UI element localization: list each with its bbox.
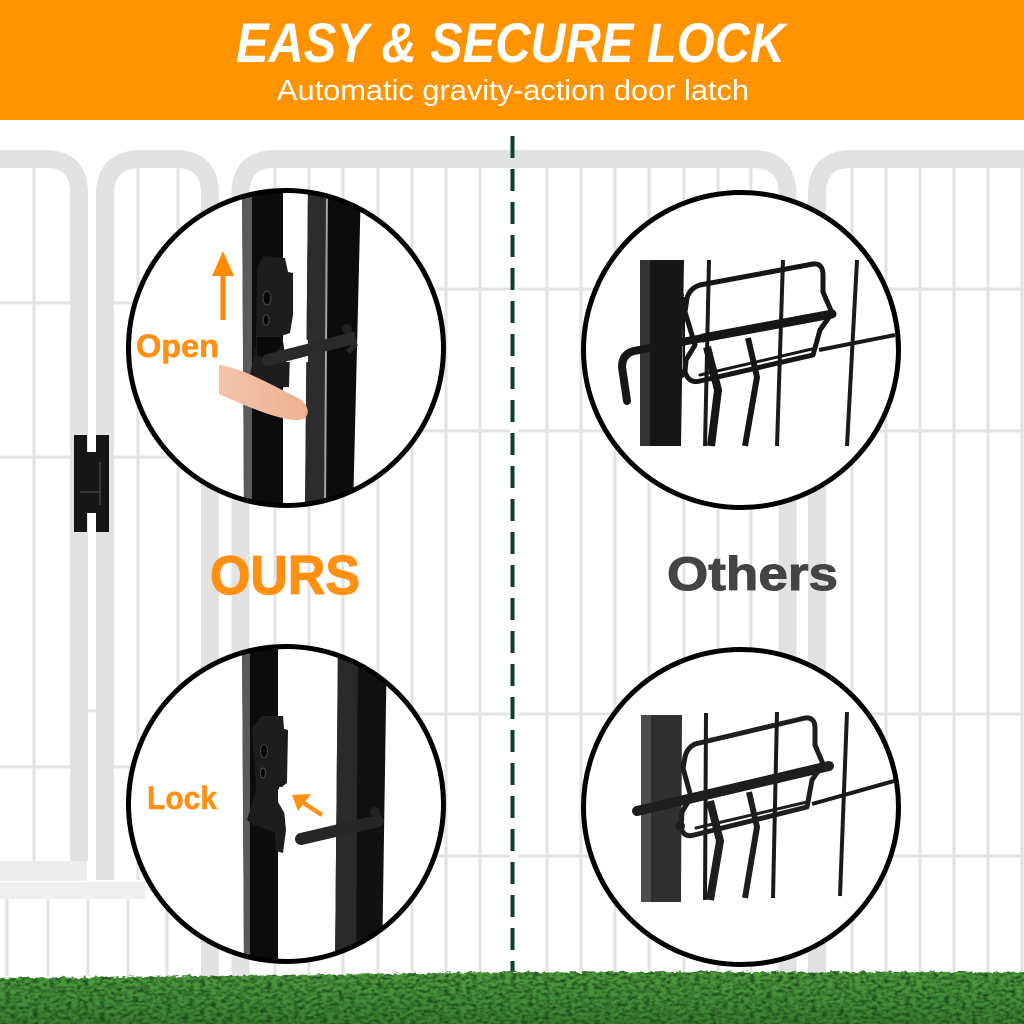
latch <box>247 716 380 853</box>
label: open: Open <box>136 328 219 364</box>
background fence <box>0 159 1024 976</box>
icon: lock arrow <box>292 794 322 815</box>
subtitle: Automatic gravity-action door latch <box>277 75 749 107</box>
panel: ours open circle <box>128 185 444 510</box>
icon: up arrow <box>212 251 234 320</box>
icon: finger <box>219 365 308 420</box>
circle outline <box>584 650 898 964</box>
grass strip <box>0 972 1024 1024</box>
label: lock: Lock <box>147 780 217 816</box>
latch wire frame <box>637 718 829 900</box>
title: EASY & SECURE LOCK <box>236 11 788 74</box>
hinge bracket <box>74 435 109 532</box>
panel: ours lock circle <box>128 640 444 965</box>
circle outline <box>128 190 444 506</box>
latch <box>250 256 355 388</box>
panel: others lock circle <box>584 650 898 964</box>
header banner <box>0 0 1024 120</box>
panel: others open circle <box>584 192 898 508</box>
heading: others: Others <box>667 547 838 600</box>
centre dashed divider <box>510 136 514 972</box>
circle outline <box>584 192 898 508</box>
latch wire frame <box>622 264 832 446</box>
heading: ours: OURS <box>210 544 360 606</box>
circle outline <box>128 646 444 962</box>
